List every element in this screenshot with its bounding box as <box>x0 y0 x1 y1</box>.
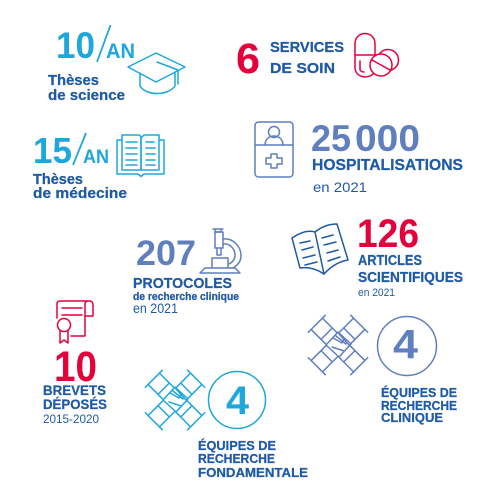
label: équipes de recherche fondamentale: FONDAMENTALE <box>198 465 308 480</box>
stat: équipes de recherche clinique <box>308 315 457 425</box>
label: équipes de recherche clinique: RECHERCHE <box>381 398 457 413</box>
icon: microscope <box>200 229 241 273</box>
icon: joined hands <box>145 370 205 430</box>
label: équipes de recherche clinique: ÉQUIPES DE <box>381 385 457 400</box>
stat: thèses de science <box>48 25 185 104</box>
icon: patient card <box>255 122 293 177</box>
number: 10: 10 <box>54 343 97 391</box>
number: 25 000: 000 <box>355 118 420 159</box>
icon: joined hands <box>308 315 368 375</box>
number: 126: 126 <box>357 212 419 256</box>
stat: thèses de médecine <box>33 130 164 202</box>
number: 6: 6 <box>236 35 260 83</box>
label: services de soin: SERVICES <box>270 39 344 56</box>
label: thèses de médecine: Thèses <box>33 171 83 188</box>
icon: diploma <box>57 301 93 343</box>
number: 207: 207 <box>136 234 196 273</box>
circle with number 4 <box>378 316 436 376</box>
number: 25 000: 25 <box>311 118 351 159</box>
circle with number 4: 4 <box>226 379 250 423</box>
label: thèses de médecine: de médecine <box>33 185 127 202</box>
stat: équipes de recherche fondamentale <box>145 370 308 480</box>
number: 10 per year <box>56 25 135 66</box>
number: 15 per year <box>33 130 109 171</box>
stat: services de soin <box>236 34 398 83</box>
label: équipes de recherche fondamentale: RECHERCHE <box>198 451 275 466</box>
label: équipes de recherche fondamentale: ÉQUIPES DE <box>198 438 276 453</box>
label: thèses de science: de science <box>48 87 125 104</box>
stat: hospitalisations <box>255 118 463 195</box>
stat: articles scientifiques <box>292 212 463 299</box>
note: en 2021: en 2021 <box>358 287 395 299</box>
label: protocoles de recherche clinique: de recherche clinique <box>133 291 239 303</box>
note: en 2021: en 2021 <box>313 180 367 195</box>
label: protocoles de recherche clinique: PROTOCOLES <box>133 275 232 292</box>
label: brevets déposés: BREVETS <box>43 382 106 398</box>
label: équipes de recherche clinique: CLINIQUE <box>381 410 443 425</box>
icon: open book <box>117 135 164 176</box>
label: articles scientifiques: SCIENTIFIQUES <box>358 270 463 286</box>
number: 10 per year: 10 <box>56 25 95 66</box>
stat: brevets déposés <box>43 301 107 426</box>
number: 15 per year: AN <box>83 147 109 168</box>
label: articles scientifiques: ARTICLES <box>358 253 422 269</box>
circle with number 4 <box>208 372 266 428</box>
note: 2015-2020: 2015-2020 <box>43 412 99 426</box>
label: hospitalisations: HOSPITALISATIONS <box>312 157 463 174</box>
icon: pills <box>355 34 398 77</box>
stat: protocoles <box>133 229 241 316</box>
label: thèses de science: Thèses <box>48 72 99 89</box>
number: 10 per year: AN <box>106 40 135 63</box>
icon: open book <box>292 224 348 274</box>
note: en 2021: en 2021 <box>133 301 178 316</box>
icon: graduation cap <box>128 53 185 94</box>
label: services de soin: DE SOIN <box>270 60 335 77</box>
number: 15 per year: 15 <box>33 130 72 171</box>
label: brevets déposés: DÉPOSÉS <box>43 396 107 412</box>
circle with number 4: 4 <box>393 321 418 367</box>
